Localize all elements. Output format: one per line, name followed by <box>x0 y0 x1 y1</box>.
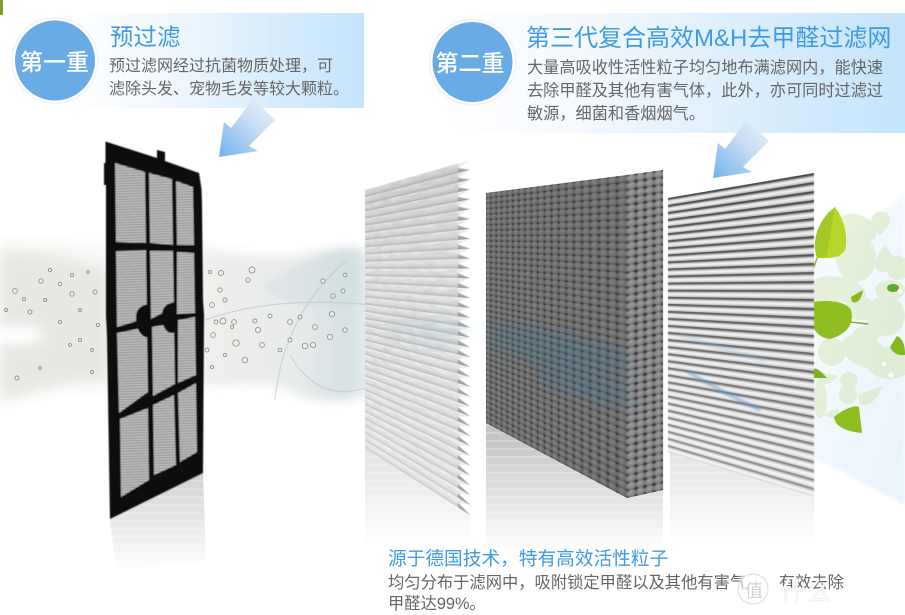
caption: activated carbon technology <box>388 548 848 613</box>
caption body: 均匀分布于滤网中，吸附锁定甲醛以及其他有害气体，有效去除 <box>388 574 844 592</box>
caption heading: 源于德国技术，特有高效活性粒子 <box>388 548 668 569</box>
panel: first stage pre-filter <box>12 13 364 108</box>
panel background <box>440 13 905 133</box>
description: pre-filter: 滤除头发、宠物毛发等较大颗粒。 <box>109 80 349 98</box>
white pleated filter <box>364 161 470 515</box>
reflection of white filter <box>365 448 470 555</box>
heading: pre-filter: 预过滤 <box>110 24 180 50</box>
badge: first stage <box>12 18 98 104</box>
reflection of pre-filter <box>110 473 206 572</box>
pleated HEPA filter <box>668 172 814 497</box>
panel background <box>60 13 364 108</box>
arrow: composite filter <box>713 120 769 178</box>
badge: second stage: 第二重 <box>436 50 504 76</box>
activated carbon filter: side face <box>626 170 664 498</box>
pre-filter frame <box>104 142 204 519</box>
corner accent <box>0 0 3 15</box>
water droplets <box>4 267 347 380</box>
description: composite filter: 去除甲醛及其他有害气体，此外，亦可同时过滤过 <box>527 82 883 100</box>
right background sky and air swoosh <box>812 195 905 505</box>
watermark: 值 <box>745 581 763 601</box>
activated carbon filter: front face <box>486 174 628 498</box>
smoke background: right of pre-filter <box>200 248 372 401</box>
leaves <box>808 207 905 433</box>
description: pre-filter: 预过滤网经过抗菌物质处理，可 <box>109 57 333 75</box>
description: composite filter: 大量高吸收性活性粒子均匀地布满滤网内，能快速 <box>527 59 883 77</box>
badge: first stage: 第一重 <box>20 49 89 75</box>
smoke background: left of pre-filter <box>0 238 110 408</box>
reflection of activated carbon filter <box>486 423 663 555</box>
heading: composite filter: 第三代复合高效M&H去甲醛过滤网 <box>526 25 891 52</box>
panel: second stage composite filter <box>430 13 905 133</box>
watermark <box>738 572 832 607</box>
caption body: 甲醛达99%。 <box>388 595 486 613</box>
watermark: 什么 <box>780 577 832 607</box>
reflection of pleated filter <box>670 452 814 565</box>
badge: second stage <box>430 19 516 105</box>
blue air tint across filters <box>390 318 765 413</box>
arrow: pre-filter <box>219 99 275 157</box>
description: composite filter: 敏源，细菌和香烟烟气。 <box>527 105 705 123</box>
